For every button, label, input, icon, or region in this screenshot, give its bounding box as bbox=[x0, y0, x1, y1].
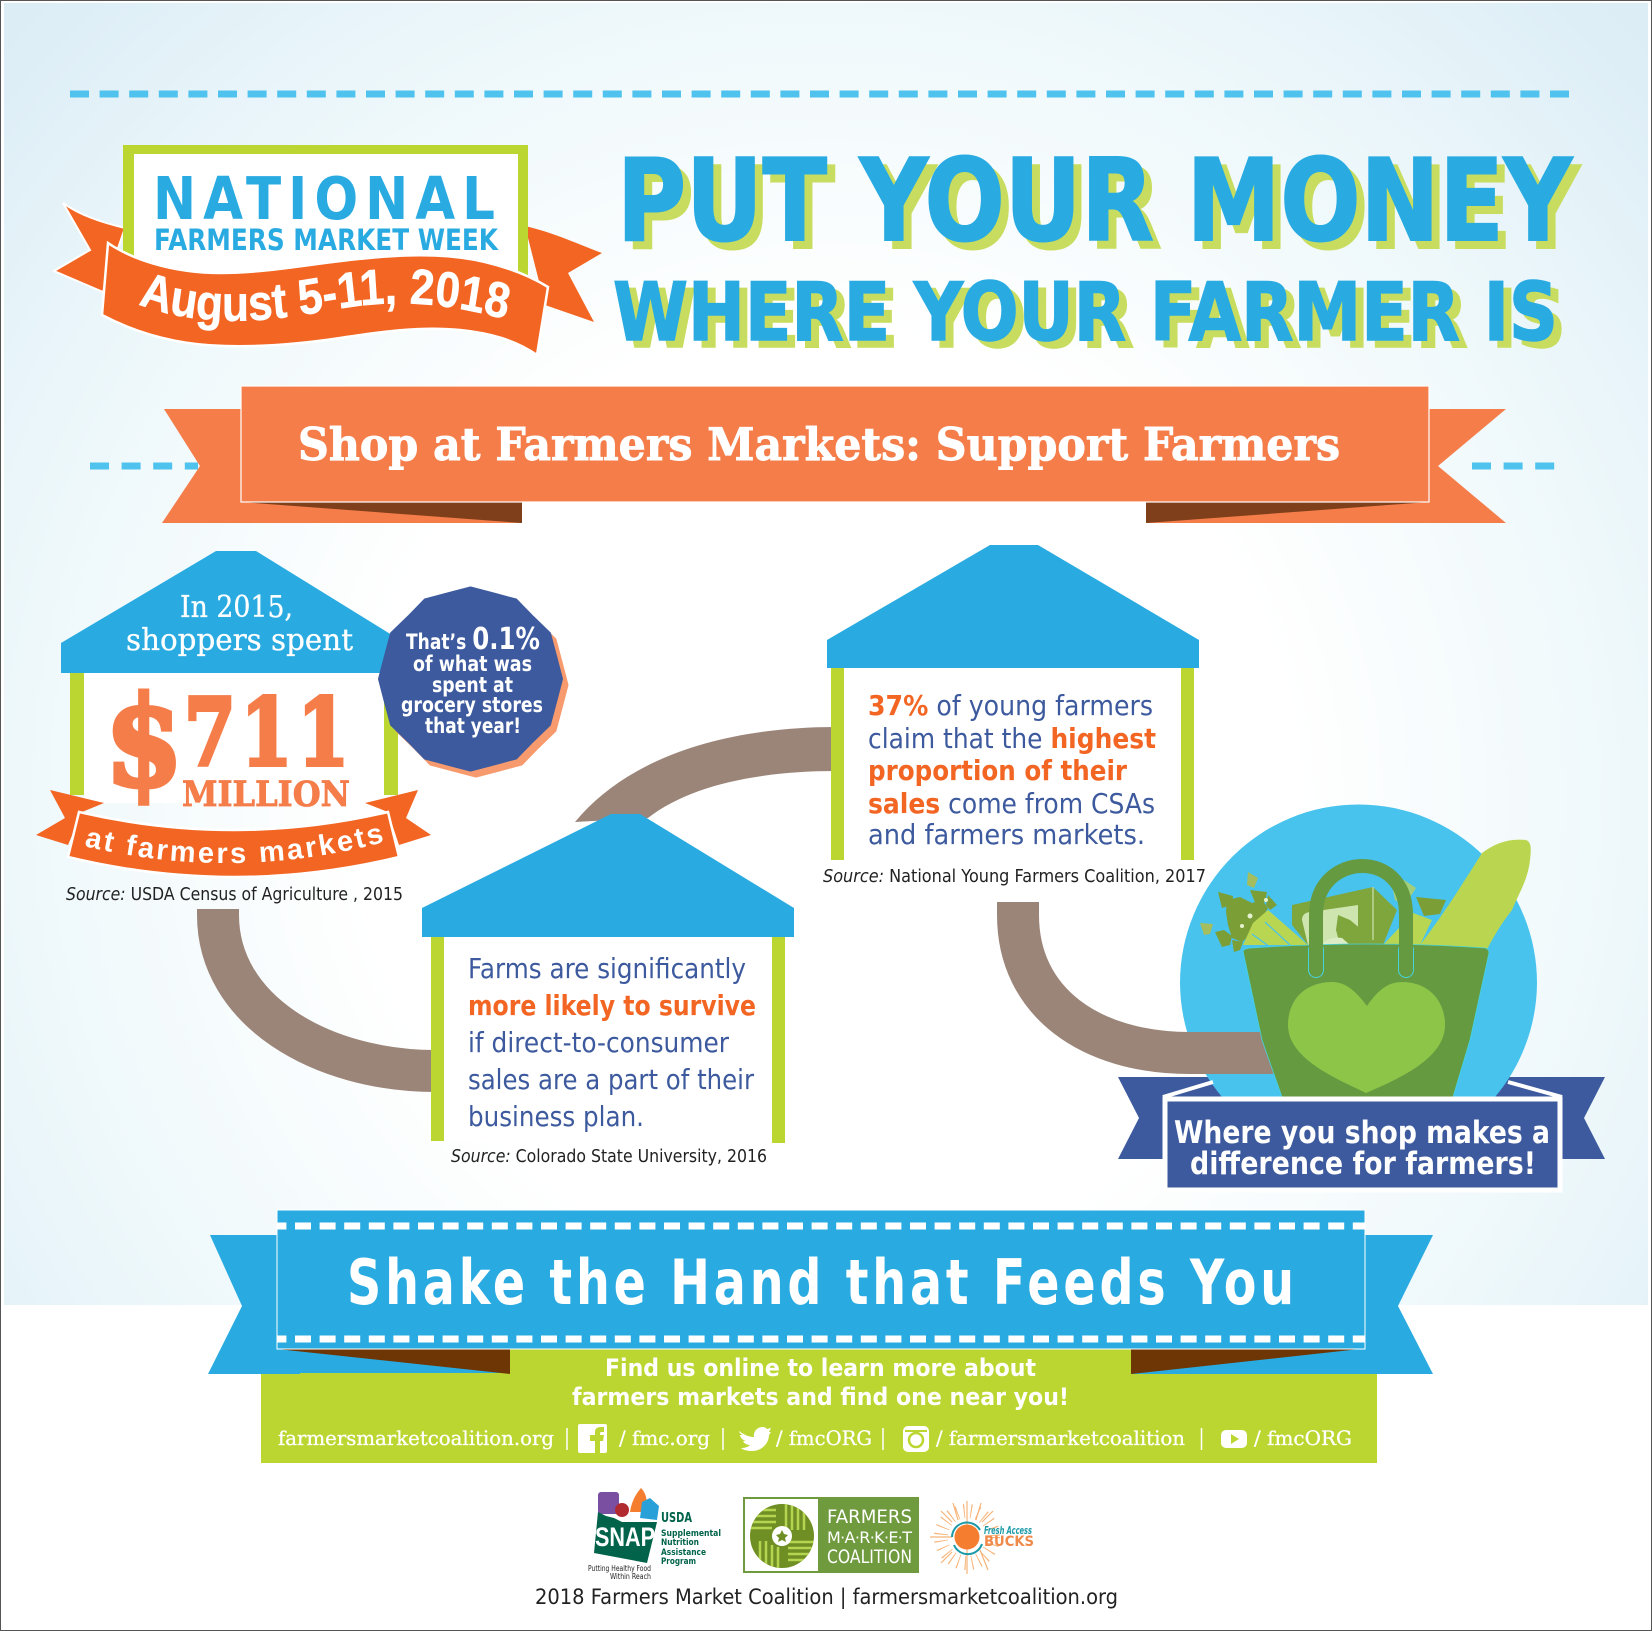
green info panel bbox=[261, 1349, 1377, 1463]
stall 2 roof bbox=[827, 545, 1199, 668]
shake banner tails bbox=[208, 1235, 1433, 1374]
SNAP wordmark: SNAP bbox=[595, 1522, 655, 1552]
$711 figure: 711 bbox=[184, 678, 354, 787]
box of produce bbox=[1292, 887, 1397, 945]
SNAP descriptor: Within Reach bbox=[610, 1572, 651, 1581]
stall 2 columns bbox=[831, 668, 1194, 860]
twitter handle: / fmcORG bbox=[776, 1426, 872, 1450]
stall 2 text: sales come from CSAs bbox=[868, 787, 1155, 820]
callout text bbox=[401, 622, 543, 738]
stall 2 text: proportion of their bbox=[868, 754, 1127, 787]
celery stalks bbox=[1243, 910, 1432, 947]
shake banner folds bbox=[277, 1349, 1360, 1374]
logo: Fresh Access Bucks bbox=[930, 1501, 1034, 1574]
FMC wordmark: FARMERS bbox=[827, 1506, 912, 1528]
FMC wordmark bbox=[827, 1506, 912, 1568]
source 2: Source: National Young Farmers Coalition, 2017 bbox=[823, 866, 1206, 887]
info heading: farmers markets and find one near you! bbox=[572, 1383, 1069, 1411]
SNAP descriptor: Nutrition bbox=[661, 1538, 699, 1548]
SNAP descriptor: Putting Healthy Food bbox=[588, 1564, 651, 1573]
instagram handle: / farmersmarketcoalition bbox=[936, 1426, 1185, 1450]
callout text: of what was bbox=[413, 652, 532, 676]
connector path into bag bbox=[1018, 902, 1300, 1053]
stall 1 ribbon: at farmers markets bbox=[86, 828, 382, 864]
icon: twitter bbox=[739, 1427, 771, 1451]
shake banner text: Shake the Hand that Feeds You bbox=[347, 1246, 1298, 1319]
badge subheading: FARMERS MARKET WEEK bbox=[154, 223, 499, 257]
icon: facebook bbox=[578, 1424, 607, 1453]
Fresh Access Bucks wordmark bbox=[984, 1524, 1034, 1550]
stall 3 text: if direct-to-consumer bbox=[468, 1026, 729, 1059]
callout ribbon: where you shop bbox=[1163, 1082, 1562, 1190]
badge date ribbon bbox=[102, 243, 548, 355]
callout text: grocery stores bbox=[401, 693, 543, 717]
stall 3 text: more likely to survive bbox=[468, 989, 756, 1022]
source 3: Source: Colorado State University, 2016 bbox=[451, 1146, 767, 1167]
badge ribbon tails bbox=[54, 203, 602, 322]
FMC wordmark: COALITION bbox=[827, 1546, 912, 1568]
stall 1 roof text: shoppers spent bbox=[126, 623, 353, 658]
badge: National Farmers Market Week bbox=[52, 145, 602, 353]
SNAP bag bbox=[594, 1512, 657, 1563]
market stall 3: farm survival bbox=[422, 814, 794, 1143]
source 1: Source: USDA Census of Agriculture , 2015 bbox=[66, 884, 403, 905]
banner text: Shop at Farmers Markets: Support Farmers bbox=[298, 418, 1340, 471]
stall 3 text: sales are a part of their bbox=[468, 1063, 754, 1096]
banner tails bbox=[162, 409, 1506, 523]
heart bbox=[1288, 982, 1445, 1093]
shopping bag illustration bbox=[1018, 804, 1537, 1097]
callout text: that year! bbox=[425, 714, 521, 738]
stall 1 roof text bbox=[126, 590, 353, 658]
SNAP food icons bbox=[598, 1488, 659, 1520]
callout ribbon text: difference for farmers! bbox=[1190, 1146, 1536, 1182]
stall 1 roof text: In 2015, bbox=[180, 590, 293, 625]
stall 2 text bbox=[868, 689, 1156, 851]
Fresh Access Bucks wordmark: BUCKS bbox=[984, 1534, 1034, 1550]
million label: MILLION bbox=[182, 774, 350, 815]
$711 figure bbox=[105, 670, 354, 815]
badge date text: August 5-11, 2018 bbox=[138, 269, 510, 331]
stall 2 text: claim that the highest bbox=[868, 722, 1156, 755]
blue circle bbox=[1180, 804, 1537, 1097]
FMC wordmark: M·A·R·K·E·T bbox=[827, 1528, 912, 1547]
ribbon tails: where you shop bbox=[1118, 1077, 1605, 1159]
icon: youtube bbox=[1221, 1430, 1247, 1448]
$711 figure: $ bbox=[105, 670, 183, 815]
SNAP descriptor: USDA bbox=[661, 1511, 692, 1526]
Fresh Access Bucks wordmark: Fresh Access bbox=[984, 1524, 1032, 1537]
shake banner body bbox=[277, 1210, 1365, 1349]
stall 2 text: and farmers markets. bbox=[868, 818, 1145, 851]
stall 1 ribbon bbox=[36, 790, 431, 877]
banner: Shake the Hand bbox=[208, 1210, 1433, 1374]
banner body bbox=[241, 386, 1429, 502]
stall 3 text bbox=[468, 952, 756, 1133]
badge heading: National: NATIONAL bbox=[153, 164, 502, 233]
stall 3 text: Farms are significantly bbox=[468, 952, 746, 985]
stall 1 roof bbox=[61, 551, 400, 673]
bag handles bbox=[1316, 866, 1406, 970]
facebook handle: / fmc.org bbox=[619, 1426, 710, 1450]
website link: farmersmarketcoalition.org bbox=[278, 1426, 554, 1450]
SNAP descriptor: Assistance bbox=[661, 1548, 706, 1558]
banner folds bbox=[241, 502, 1429, 523]
callout ribbon text bbox=[1174, 1115, 1550, 1182]
callout ribbon text: Where you shop makes a bbox=[1174, 1115, 1550, 1151]
callout text: spent at bbox=[432, 673, 513, 697]
stall 3 columns bbox=[431, 937, 785, 1143]
FMC emblem bbox=[750, 1504, 814, 1568]
leafy greens bbox=[1200, 872, 1446, 952]
banner: Shop at Farmers Markets bbox=[162, 386, 1506, 523]
youtube handle: / fmcORG bbox=[1254, 1426, 1352, 1450]
market stall 2: young farmers bbox=[827, 545, 1199, 863]
SNAP descriptor: Program bbox=[661, 1557, 696, 1567]
badge green frame bbox=[123, 145, 528, 290]
stall 1 columns bbox=[70, 673, 398, 795]
stall 2 text: 37% of young farmers bbox=[868, 689, 1153, 722]
stall 3 roof bbox=[422, 814, 794, 937]
baguette bbox=[1419, 840, 1531, 951]
logo: SNAP bbox=[588, 1488, 721, 1581]
bag body bbox=[1243, 944, 1489, 1097]
connector paths bbox=[218, 727, 836, 1071]
info heading bbox=[572, 1354, 1069, 1411]
callout text: That’s 0.1% bbox=[406, 622, 540, 657]
logo: Farmers Market Coalition bbox=[743, 1497, 919, 1573]
footer credit: 2018 Farmers Market Coalition | farmersmarketcoalition.org bbox=[535, 1585, 1118, 1610]
starburst callout bbox=[380, 588, 567, 776]
SNAP descriptor: Supplemental bbox=[661, 1529, 721, 1539]
stall 3 text: business plan. bbox=[468, 1100, 644, 1133]
SNAP descriptor bbox=[588, 1511, 721, 1581]
icon: instagram bbox=[903, 1426, 929, 1452]
info heading: Find us online to learn more about bbox=[605, 1354, 1036, 1382]
sunburst bbox=[930, 1501, 993, 1574]
market stall 1: $711 million bbox=[36, 551, 431, 877]
